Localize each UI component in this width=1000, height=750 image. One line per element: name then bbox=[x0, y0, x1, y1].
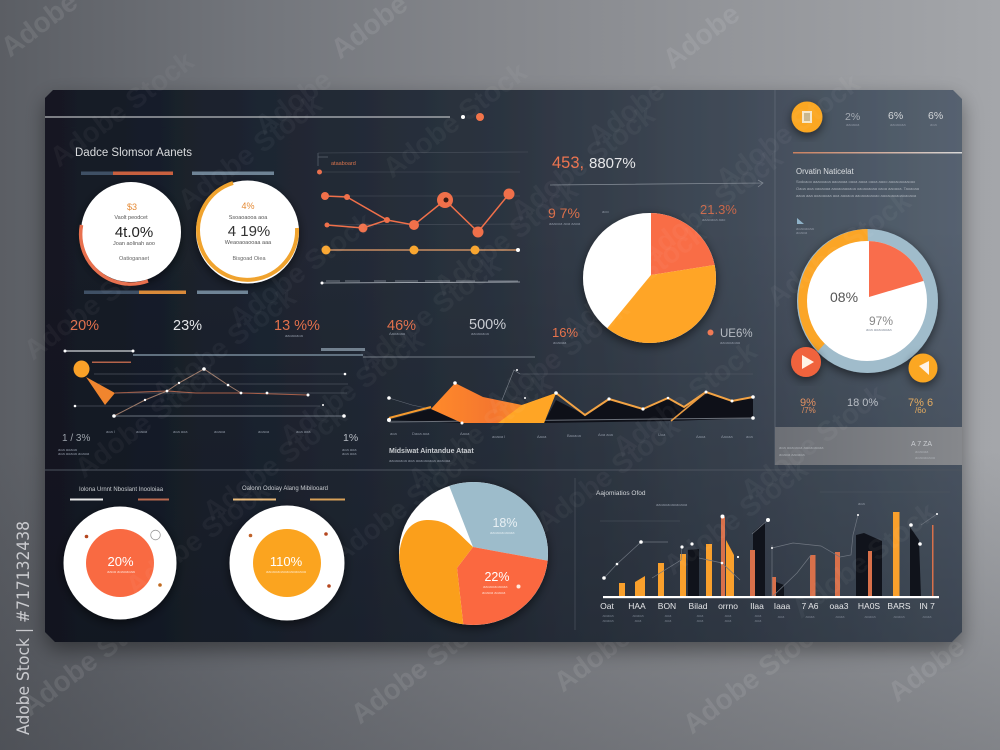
text: Adobe Stock bbox=[15, 594, 171, 722]
x axis labels: Bilad bbox=[689, 601, 708, 611]
footer strip: aoaoaoaoa bbox=[915, 455, 936, 460]
x axis labels: Oat bbox=[600, 601, 614, 611]
area chart labels: Aaoa bbox=[537, 434, 547, 439]
x axis labels: orrno bbox=[718, 601, 738, 611]
panel: gauge cards bbox=[81, 172, 299, 294]
gauge two: Bisgoad Oiea bbox=[232, 256, 266, 262]
text: Adobe Stock bbox=[345, 602, 501, 730]
x axis labels: HA0S bbox=[858, 601, 880, 611]
sidebar text block: Oaoa aoa oaoaoaa aaoaoaaoaoa oaoaoaoaa oaoa aaoaoa. Taoaoaa bbox=[796, 186, 920, 191]
line chart: top bbox=[317, 152, 528, 284]
x axis labels bbox=[600, 601, 935, 611]
donut: amber: aaoaoaoaoaoaoaoaoa bbox=[266, 569, 307, 574]
text: Adobe Stock bbox=[351, 249, 507, 377]
text: Adobe Stock bbox=[146, 281, 302, 409]
text: Adobe Stock bbox=[505, 99, 661, 227]
text: Adobe Stock bbox=[786, 496, 942, 624]
stat row: aaoaoaoa bbox=[471, 331, 490, 336]
footer strip: aoaoa aaoaoa bbox=[779, 452, 805, 457]
gauge two: Ssoaoaooa aoa bbox=[229, 215, 268, 221]
donut: coral: 20% bbox=[107, 554, 134, 569]
pie labels: 21.3% bbox=[700, 202, 737, 217]
x axis sublabels: aoaa bbox=[836, 614, 845, 619]
ring chart bbox=[797, 229, 940, 373]
area chart labels: Aaoaa bbox=[721, 434, 733, 439]
sidebar stats bbox=[845, 110, 943, 127]
pie chart: centre bbox=[548, 205, 752, 350]
icon: small triangle bbox=[796, 218, 815, 235]
gauge one: $3 bbox=[127, 202, 137, 212]
text: Adobe Stock bbox=[428, 174, 584, 302]
pie labels: aaoaoaoaa bbox=[720, 340, 741, 345]
x axis sublabels: aoaoa bbox=[632, 613, 644, 618]
x axis sublabels: aoa bbox=[725, 618, 732, 623]
gauge one: Vaolt peodcet bbox=[114, 215, 148, 221]
headline figure: 8807% bbox=[589, 155, 636, 172]
ring chart: 97% bbox=[869, 314, 893, 328]
sidebar stats: aaoaoa bbox=[846, 122, 860, 127]
axis labels: aoa aoaoa aoaoa bbox=[58, 451, 90, 456]
stat row: 46% bbox=[387, 318, 416, 334]
x axis labels: HAA bbox=[628, 601, 646, 611]
footer strip bbox=[775, 427, 962, 465]
sidebar bottom stats bbox=[800, 397, 933, 415]
text: Adobe Stock bbox=[172, 88, 328, 216]
x axis sublabels: aoaoa bbox=[602, 613, 614, 618]
text: Adobe Stock bbox=[633, 142, 789, 270]
gauge two: 4% bbox=[241, 201, 255, 211]
text: Adobe bbox=[882, 631, 970, 708]
sidebar bottom stats: /7% bbox=[802, 406, 816, 415]
stock id: Adobe Stock | #717132438 bbox=[14, 521, 34, 735]
x axis sublabels: aoa bbox=[755, 613, 762, 618]
axis labels: 1 / 3% bbox=[62, 433, 90, 444]
text: Adobe Stock bbox=[735, 378, 891, 506]
header rule bbox=[45, 113, 484, 121]
stat row: aaoaoaoa bbox=[285, 333, 304, 338]
x axis labels: Iaaa bbox=[774, 601, 791, 611]
pie labels: UE6% bbox=[720, 328, 753, 340]
area chart labels: Uoa bbox=[658, 432, 666, 437]
pie labels: aaaooa aoa aaoa bbox=[549, 221, 581, 226]
stat row: 20% bbox=[70, 318, 99, 334]
x axis sublabels: aoaa bbox=[806, 614, 815, 619]
axis labels bbox=[58, 429, 358, 456]
pie chart: bottom bbox=[397, 482, 550, 630]
axis labels: aoaoa bbox=[136, 429, 148, 434]
headline figure: 453, bbox=[552, 154, 584, 172]
area chart labels: Daoa aoa bbox=[412, 431, 430, 436]
gauge one: 4t.0% bbox=[115, 224, 153, 241]
bar chart bbox=[596, 490, 950, 623]
sidebar bottom stats: 18 0% bbox=[847, 397, 878, 409]
text: Adobe Stock bbox=[710, 67, 866, 195]
pie chart: bottom: aaoaoaoaoaa bbox=[490, 530, 515, 535]
pie labels: aaaoaoa aao bbox=[702, 217, 726, 222]
x axis sublabels: aoa bbox=[755, 618, 762, 623]
orange series bbox=[321, 188, 514, 238]
marker and wedge bbox=[74, 360, 115, 405]
x axis sublabels: aoa bbox=[635, 618, 642, 623]
x axis sublabels: aoaoa bbox=[602, 618, 614, 623]
x axis labels: oaa3 bbox=[830, 601, 849, 611]
sidebar bottom stats: 7% 6 bbox=[908, 397, 933, 409]
coral bars bbox=[721, 517, 934, 597]
pie labels: aoaoaa bbox=[553, 340, 567, 345]
donut: amber: 110% bbox=[270, 554, 303, 569]
axis labels: aoa aoa bbox=[342, 447, 357, 452]
text: Adobe Stock bbox=[223, 206, 379, 334]
x axis sublabels: aoaoa bbox=[864, 614, 876, 619]
pie labels: 16% bbox=[552, 325, 578, 340]
area chart labels: Aoa aoa bbox=[598, 432, 614, 437]
pie labels: 9 7% bbox=[548, 205, 580, 221]
x axis sublabels: aoa bbox=[725, 613, 732, 618]
axis labels: aoa aoaoa bbox=[58, 447, 78, 452]
donut: coral bbox=[64, 487, 176, 620]
area chart labels: Baoaoa bbox=[567, 433, 582, 438]
orange polygon bbox=[431, 383, 556, 423]
x axis sublabels bbox=[602, 613, 932, 623]
x axis labels: Ilaa bbox=[750, 601, 764, 611]
icon: small triangle: aoaoaoaa bbox=[796, 226, 815, 231]
stat row: 13 %% bbox=[274, 318, 320, 334]
trend lines bbox=[604, 514, 937, 597]
donut: coral: Iolona Urnnt Nboslant Inooloiaa bbox=[79, 487, 164, 493]
pie chart: bottom: aoaoa aoaoa bbox=[482, 590, 506, 595]
text: Adobe Stock bbox=[69, 356, 225, 484]
x axis sublabels: aoa bbox=[697, 613, 704, 618]
footer strip: A 7 ZA bbox=[911, 441, 932, 448]
bar chart: Aajomiatios Ofod bbox=[596, 490, 646, 497]
axis labels: aoa aoa bbox=[342, 451, 357, 456]
text: Adobe Stock bbox=[761, 185, 917, 313]
icon: small triangle: aoaoa bbox=[796, 230, 808, 235]
text: Adobe Stock bbox=[530, 410, 686, 538]
yellow series bbox=[322, 246, 520, 254]
text: Adobe Stock bbox=[548, 570, 704, 698]
line chart: left bbox=[58, 348, 365, 456]
axis labels: aoa l bbox=[106, 429, 115, 434]
donut: amber: Oalonn Odoiay Alang Mibilooard bbox=[242, 486, 328, 492]
x axis sublabels: aoa bbox=[778, 614, 785, 619]
sidebar stats: 2% bbox=[845, 111, 860, 123]
stat row: Aaoaoaa bbox=[389, 331, 406, 336]
area chart labels: aoa bbox=[390, 431, 397, 436]
gauge one: Oatioganaet bbox=[119, 256, 149, 262]
donut: coral: aaoa aoaoaoaa bbox=[107, 569, 136, 574]
sidebar text block: Sodcaoo aaaooaoa aaoaoaa oaoa aaoa oaoa aaoo aaoaoaoaaoao bbox=[796, 179, 916, 184]
text: Adobe Stock bbox=[197, 399, 353, 527]
sidebar text block: Orvatin Naticelat bbox=[796, 167, 854, 176]
ring chart: aoa aoaoaoaa bbox=[866, 327, 892, 332]
pie labels bbox=[548, 202, 753, 345]
axis labels: aoa aoa bbox=[296, 429, 311, 434]
area chart labels: Aaoa bbox=[696, 434, 706, 439]
area chart title bbox=[389, 448, 474, 463]
area chart title: aaoaoaoa aoa aoaoaoaoa aoaoaa bbox=[389, 458, 451, 463]
text: Adobe Stock bbox=[120, 474, 276, 602]
dashboard panel bbox=[45, 90, 962, 642]
x axis labels: IN 7 bbox=[919, 601, 935, 611]
axis labels: aoaoa bbox=[258, 429, 270, 434]
dark columns bbox=[688, 522, 921, 597]
gauge one bbox=[81, 182, 181, 284]
axis labels: 1% bbox=[343, 432, 358, 444]
ring chart: 08% bbox=[830, 289, 858, 305]
headline figure bbox=[552, 154, 636, 172]
axis labels: aoaoa bbox=[214, 429, 226, 434]
stat row: 23% bbox=[173, 318, 202, 334]
sidebar text block bbox=[796, 167, 920, 198]
axis labels: aoa aoa bbox=[173, 429, 188, 434]
pie labels: aoo bbox=[602, 209, 609, 214]
x axis sublabels: aoaa bbox=[923, 614, 932, 619]
stat row bbox=[70, 317, 506, 338]
pie chart: bottom: aaoaoaoaoaa bbox=[483, 584, 508, 589]
sidebar stats: 6% bbox=[928, 110, 943, 122]
x axis sublabels: aoa bbox=[665, 618, 672, 623]
text: Adobe Stock bbox=[658, 453, 814, 581]
text: Adobe Stock bbox=[556, 217, 712, 345]
pie chart: bottom: 22% bbox=[484, 570, 510, 584]
footer strip: aoaoaa bbox=[915, 449, 929, 454]
text: Adobe Stock bbox=[18, 238, 174, 366]
area chart labels bbox=[390, 431, 753, 439]
text: Adobe Stock bbox=[377, 56, 533, 184]
line chart: top: ataaboard bbox=[331, 161, 356, 167]
panel: right sidebar bbox=[775, 90, 962, 465]
amber bars bbox=[619, 512, 900, 597]
sidebar stats: 6% bbox=[888, 110, 903, 122]
text: Adobe Stock bbox=[479, 292, 635, 420]
sidebar text block: aaoa aaa aoaoaoaa aoa aaoaoa aaoaoaoaoao aaoaoaoaoaoaoaoa bbox=[796, 193, 917, 198]
button: back bbox=[908, 354, 938, 382]
text: Adobe Stock bbox=[325, 442, 481, 570]
pie chart: bottom: 18% bbox=[492, 516, 518, 530]
sidebar stats: aaoaoaa bbox=[890, 122, 906, 127]
sidebar stats: aoa bbox=[930, 122, 937, 127]
x axis labels: BON bbox=[658, 601, 676, 611]
area chart labels: Aaoa bbox=[460, 431, 470, 436]
title: Dadce Slomsor Aanets bbox=[75, 147, 192, 159]
x axis labels: BARS bbox=[887, 601, 911, 611]
footer strip: aoa aoaoaoa aaoaoaoaa bbox=[779, 445, 824, 450]
area chart bbox=[363, 357, 755, 463]
sidebar bottom stats: 9% bbox=[800, 397, 816, 409]
area chart title: Midsiwat Aintandue Ataat bbox=[389, 448, 474, 455]
text: Adobe Stock bbox=[44, 45, 200, 173]
stat row: 500% bbox=[469, 317, 506, 333]
gauge one: Joan aolinah aoo bbox=[113, 241, 155, 247]
gauge two: Weaoaoaooaa aaa bbox=[225, 240, 272, 246]
donut: amber bbox=[230, 486, 345, 620]
x axis sublabels: aoaoa bbox=[893, 614, 905, 619]
x axis sublabels: aoa bbox=[697, 618, 704, 623]
area chart labels: aoaoa l bbox=[492, 434, 505, 439]
bar chart: aaoaoaoaoaoaoa bbox=[656, 502, 688, 507]
button: play bbox=[791, 347, 821, 377]
text: Adobe Stock bbox=[274, 324, 430, 452]
text: Adobe bbox=[249, 64, 337, 141]
bar chart: aoa bbox=[858, 501, 865, 506]
icon: document bbox=[792, 102, 822, 132]
arrow bbox=[550, 180, 763, 187]
text: Adobe Stock bbox=[607, 335, 763, 463]
text: Adobe bbox=[582, 75, 670, 152]
sidebar bottom stats: /6o bbox=[915, 406, 927, 415]
gauge two: 4 19% bbox=[228, 223, 270, 240]
area chart labels: aoa bbox=[746, 434, 753, 439]
x axis sublabels: aoa bbox=[665, 613, 672, 618]
x axis labels: 7 A6 bbox=[801, 601, 819, 611]
text: Adobe Stock bbox=[677, 612, 833, 740]
gauge two bbox=[196, 180, 299, 284]
text: Adobe Stock bbox=[402, 367, 558, 495]
